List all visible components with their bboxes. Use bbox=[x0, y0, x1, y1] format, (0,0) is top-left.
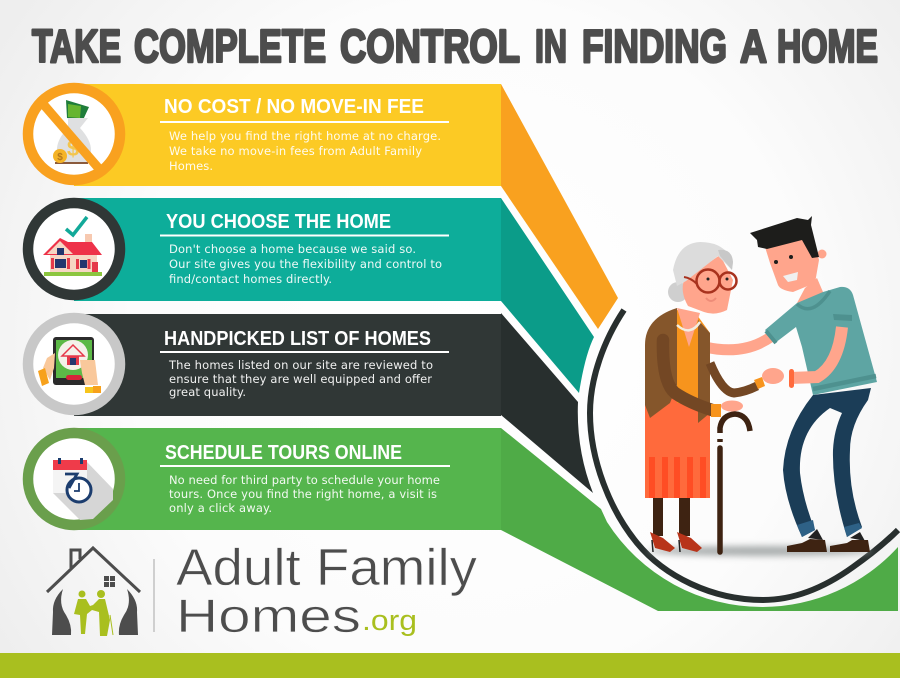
man's arm and hand bbox=[762, 327, 842, 388]
text: handpicked: ensure that they are well equipped and offer bbox=[169, 372, 432, 386]
text: no cost: Homes. bbox=[169, 159, 213, 173]
illustration: people bbox=[645, 216, 877, 556]
teal band bbox=[74, 198, 501, 301]
text: schedule: No need for third party to schedule your home bbox=[169, 473, 440, 487]
heading: handpicked: HANDPICKED LIST OF HOMES bbox=[164, 328, 431, 350]
green fold bbox=[501, 428, 898, 611]
logo text: Homes bbox=[176, 589, 361, 642]
logo text: Adult Family bbox=[176, 539, 477, 597]
icon: no money bag bbox=[28, 88, 120, 180]
panel: you choose bbox=[28, 198, 594, 393]
text: schedule bbox=[169, 473, 440, 515]
text: handpicked bbox=[168, 358, 433, 399]
text: no cost: We take no move-in fees from Adult Family bbox=[169, 144, 422, 158]
panel: no cost bbox=[28, 84, 618, 329]
title bbox=[32, 20, 878, 72]
logo: adult family homes bbox=[47, 539, 477, 642]
panel: schedule bbox=[28, 428, 898, 611]
text: no cost: We help you find the right home at no charge. bbox=[169, 129, 441, 143]
man bbox=[705, 216, 877, 552]
cane bbox=[720, 414, 750, 552]
heading: you choose: YOU CHOOSE THE HOME bbox=[166, 211, 391, 233]
green band bbox=[74, 428, 501, 530]
icon: no money bag: $ bbox=[67, 136, 79, 161]
text: no cost bbox=[169, 129, 441, 173]
heading: no cost: NO COST / NO MOVE-IN FEE bbox=[164, 96, 424, 118]
title: TAKE bbox=[32, 20, 121, 72]
panel: handpicked bbox=[28, 313, 593, 493]
text: you choose bbox=[169, 242, 442, 286]
text: you choose: Our site gives you the flexibility and control to bbox=[169, 257, 442, 271]
icon: calendar clock bbox=[28, 433, 120, 525]
title: COMPLETE bbox=[134, 20, 326, 72]
icon: tablet list bbox=[28, 318, 120, 410]
text: handpicked: The homes listed on our site are reviewed to bbox=[168, 358, 433, 372]
teal fold bbox=[501, 198, 594, 393]
title: IN bbox=[535, 20, 567, 72]
yellow fold bbox=[501, 84, 618, 329]
icon: no money bag: $ bbox=[57, 152, 63, 163]
text: handpicked: great quality. bbox=[169, 385, 246, 399]
logo icon bbox=[47, 548, 140, 636]
circular ring bbox=[590, 310, 898, 600]
logo text: .org bbox=[362, 605, 417, 637]
text: schedule: tours. Once you find the right home, a visit is bbox=[169, 487, 437, 501]
text: you choose: find/contact homes directly. bbox=[169, 272, 332, 286]
title: FINDING bbox=[582, 20, 727, 72]
arm reaching woman's back bbox=[705, 336, 772, 350]
title: A bbox=[740, 20, 767, 72]
title: CONTROL bbox=[340, 20, 520, 72]
text: you choose: Don't choose a home because we said so. bbox=[169, 242, 416, 256]
ground shadow bbox=[648, 546, 872, 556]
dark fold bbox=[501, 313, 593, 493]
logo text bbox=[176, 539, 477, 642]
heading: schedule: SCHEDULE TOURS ONLINE bbox=[165, 442, 402, 464]
woman bbox=[645, 242, 765, 552]
dark band bbox=[74, 314, 501, 416]
bottom bar bbox=[0, 653, 900, 678]
icon: house with check bbox=[28, 203, 120, 295]
yellow band bbox=[74, 84, 501, 186]
text: schedule: only a click away. bbox=[169, 501, 272, 515]
